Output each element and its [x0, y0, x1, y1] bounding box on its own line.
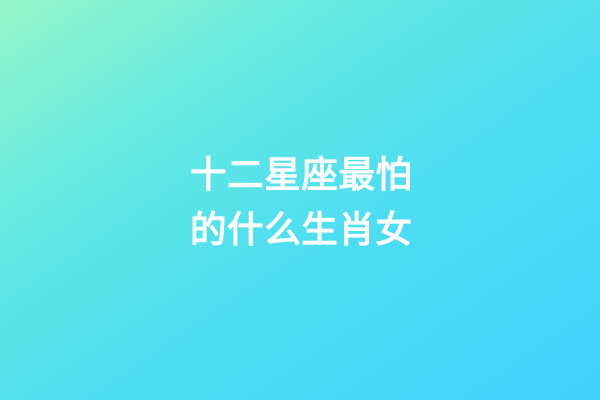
- title: 十二星座最怕: [190, 154, 413, 195]
- title: 的什么生肖女: [190, 209, 413, 250]
- title: [190, 154, 413, 250]
